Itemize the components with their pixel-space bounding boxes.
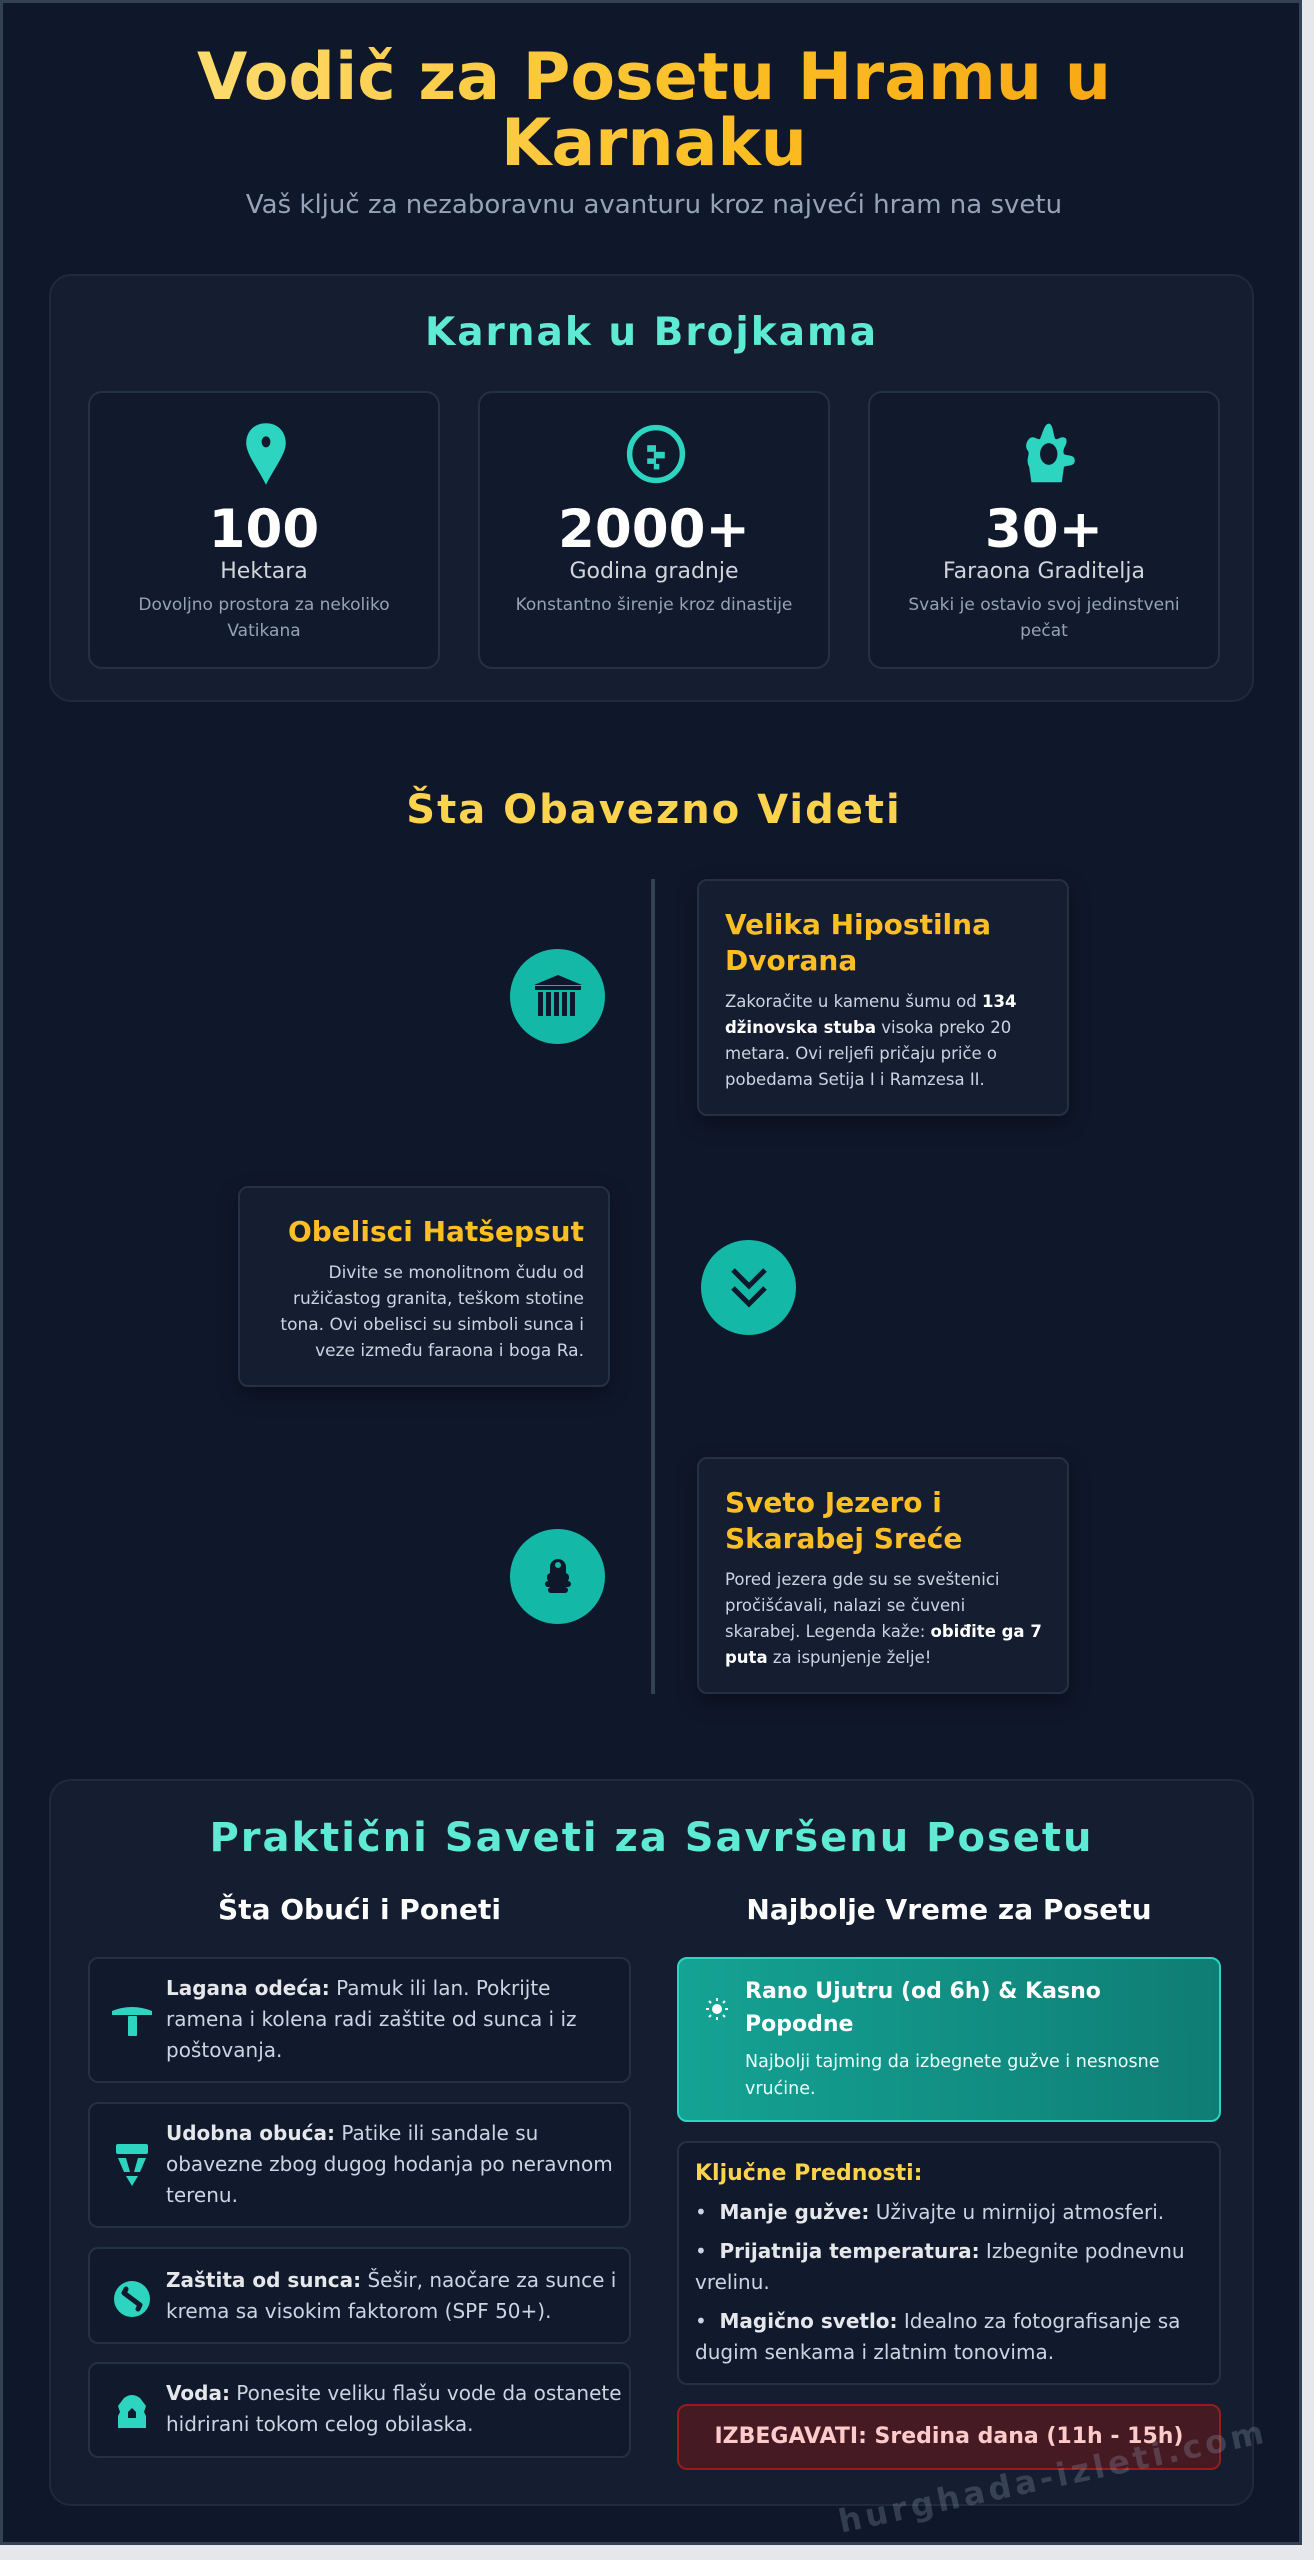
stat card: 100: Hektara bbox=[220, 559, 308, 584]
tip: sun protection bbox=[88, 2247, 631, 2344]
heading: Praktični Saveti: Praktični Saveti za Savršenu Posetu bbox=[209, 1815, 1094, 1861]
stat card: 2000+: Godina gradnje bbox=[569, 559, 739, 584]
panel: key benefits: Ključne Prednosti: bbox=[695, 2161, 922, 2186]
panel: key benefits: • Manje gužve: Uživajte u mirnijoj atmosferi. bbox=[695, 2200, 1164, 2224]
card: Sveto Jezero: Pored jezera gde su se sveštenici pročišćavali, nalazi se čuveni skarabej. Legenda kaže: obiđite ga 7 puta za ispunjenje želje! bbox=[725, 1570, 1042, 1667]
icon: temple bbox=[510, 949, 605, 1044]
title: Karnaku bbox=[501, 106, 807, 181]
panel: key benefits bbox=[677, 2141, 1221, 2385]
icon: shoe bbox=[116, 2144, 148, 2186]
icon: sun protection bbox=[114, 2281, 150, 2317]
tip: clothing: Lagana odeća: Pamuk ili lan. Pokrijte ramena i kolena radi zaštite od sunca i iz poštovanja. bbox=[166, 1976, 577, 2062]
stat card: 30+: 30+ bbox=[985, 499, 1103, 560]
callout: avoid midday bbox=[677, 2404, 1221, 2470]
tip: water bbox=[88, 2362, 631, 2458]
icon: sun bbox=[706, 1998, 728, 2020]
stat card: 30+: Faraona Graditelja bbox=[943, 559, 1145, 584]
callout: avoid midday: IZBEGAVATI: Sredina dana (11h - 15h) bbox=[714, 2424, 1183, 2449]
title bbox=[3, 45, 1305, 177]
icon: chevrons bbox=[701, 1240, 796, 1335]
title: Vodič za Posetu Hramu u bbox=[197, 40, 1111, 115]
callout: best time bbox=[677, 1957, 1221, 2122]
heading: Šta Obući i Poneti: Šta Obući i Poneti bbox=[218, 1893, 501, 1926]
icon: pharaoh bbox=[1026, 424, 1075, 482]
heading: Najbolje Vreme: Najbolje Vreme za Posetu bbox=[746, 1893, 1152, 1926]
card: Obelisci Hatšepsut: Divite se monolitnom čudu od ružičastog granita, teškom stotine tona. Ovi obelisci su simboli sunca i veze između faraona i boga Ra. bbox=[280, 1263, 584, 1361]
panel: stats bbox=[49, 274, 1254, 702]
icon: scarab bbox=[510, 1529, 605, 1624]
icon: water bottle bbox=[118, 2395, 146, 2428]
stat card: 2000+ bbox=[478, 391, 830, 669]
card: Sveto Jezero bbox=[697, 1457, 1069, 1694]
card: Obelisci Hatšepsut: Obelisci Hatšepsut bbox=[288, 1215, 584, 1248]
subtitle: Vaš ključ za nezaboravnu avanturu kroz najveći hram na svetu bbox=[246, 190, 1062, 220]
stat card: 100 bbox=[88, 391, 440, 669]
card: Obelisci Hatšepsut bbox=[238, 1186, 610, 1387]
icon: location pin bbox=[246, 423, 286, 485]
card: Velika Hipostilna Dvorana bbox=[697, 879, 1069, 1116]
timeline line bbox=[651, 879, 655, 1694]
heading: Šta Obavezno Videti: Šta Obavezno Videti bbox=[406, 787, 902, 833]
icon: timer bbox=[626, 424, 686, 484]
panel: practical tips bbox=[49, 1779, 1254, 2506]
panel: key benefits: • Magično svetlo: Idealno za fotografisanje sa dugim senkama i zlatnim tonovima. bbox=[695, 2309, 1180, 2364]
stat card: 100: 100 bbox=[209, 499, 319, 560]
watermark: hurghada-izleti.com bbox=[835, 2412, 1271, 2541]
tip: shoes bbox=[88, 2102, 631, 2228]
card: Velika Hipostilna Dvorana: Zakoračite u kamenu šumu od 134 džinovska stuba visoka preko 20 metara. Ovi reljefi pričaju priče o pobedama Setija I i Ramzesa II. bbox=[725, 992, 1016, 1089]
panel: key benefits: • Prijatnija temperatura: Izbegnite podnevnu vrelinu. bbox=[695, 2239, 1185, 2294]
card: Sveto Jezero: Sveto Jezero i Skarabej Sreće bbox=[725, 1486, 962, 1555]
callout: best time: Najbolji tajming da izbegnete gužve i nesnosne vrućine. bbox=[745, 2052, 1159, 2099]
tip: water: Voda: Ponesite veliku flašu vode da ostanete hidrirani tokom celog obilaska. bbox=[166, 2381, 622, 2436]
card: Velika Hipostilna Dvorana: Velika Hipostilna Dvorana bbox=[725, 908, 991, 977]
icon: shirt bbox=[112, 2007, 152, 2036]
stat card: 30+: Svaki je ostavio svoj jedinstveni pečat bbox=[908, 595, 1180, 641]
tip: clothing bbox=[88, 1957, 631, 2083]
stat card: 100: Dovoljno prostora za nekoliko Vatikana bbox=[138, 595, 390, 641]
tip: shoes: Udobna obuća: Patike ili sandale su obavezne zbog dugog hodanja po neravnom terenu. bbox=[166, 2121, 613, 2207]
stat card: 30+ bbox=[868, 391, 1220, 669]
tip: sun protection: Zaštita od sunca: Šešir, naočare za sunce i krema sa visokim faktorom (SPF 50+). bbox=[166, 2268, 616, 2323]
stat card: 2000+: Konstantno širenje kroz dinastije bbox=[516, 595, 792, 615]
stat card: 2000+: 2000+ bbox=[558, 499, 750, 560]
heading: Karnak u Brojkama: Karnak u Brojkama bbox=[425, 310, 878, 355]
callout: best time: Rano Ujutru (od 6h) & Kasno Popodne bbox=[745, 1979, 1101, 2037]
